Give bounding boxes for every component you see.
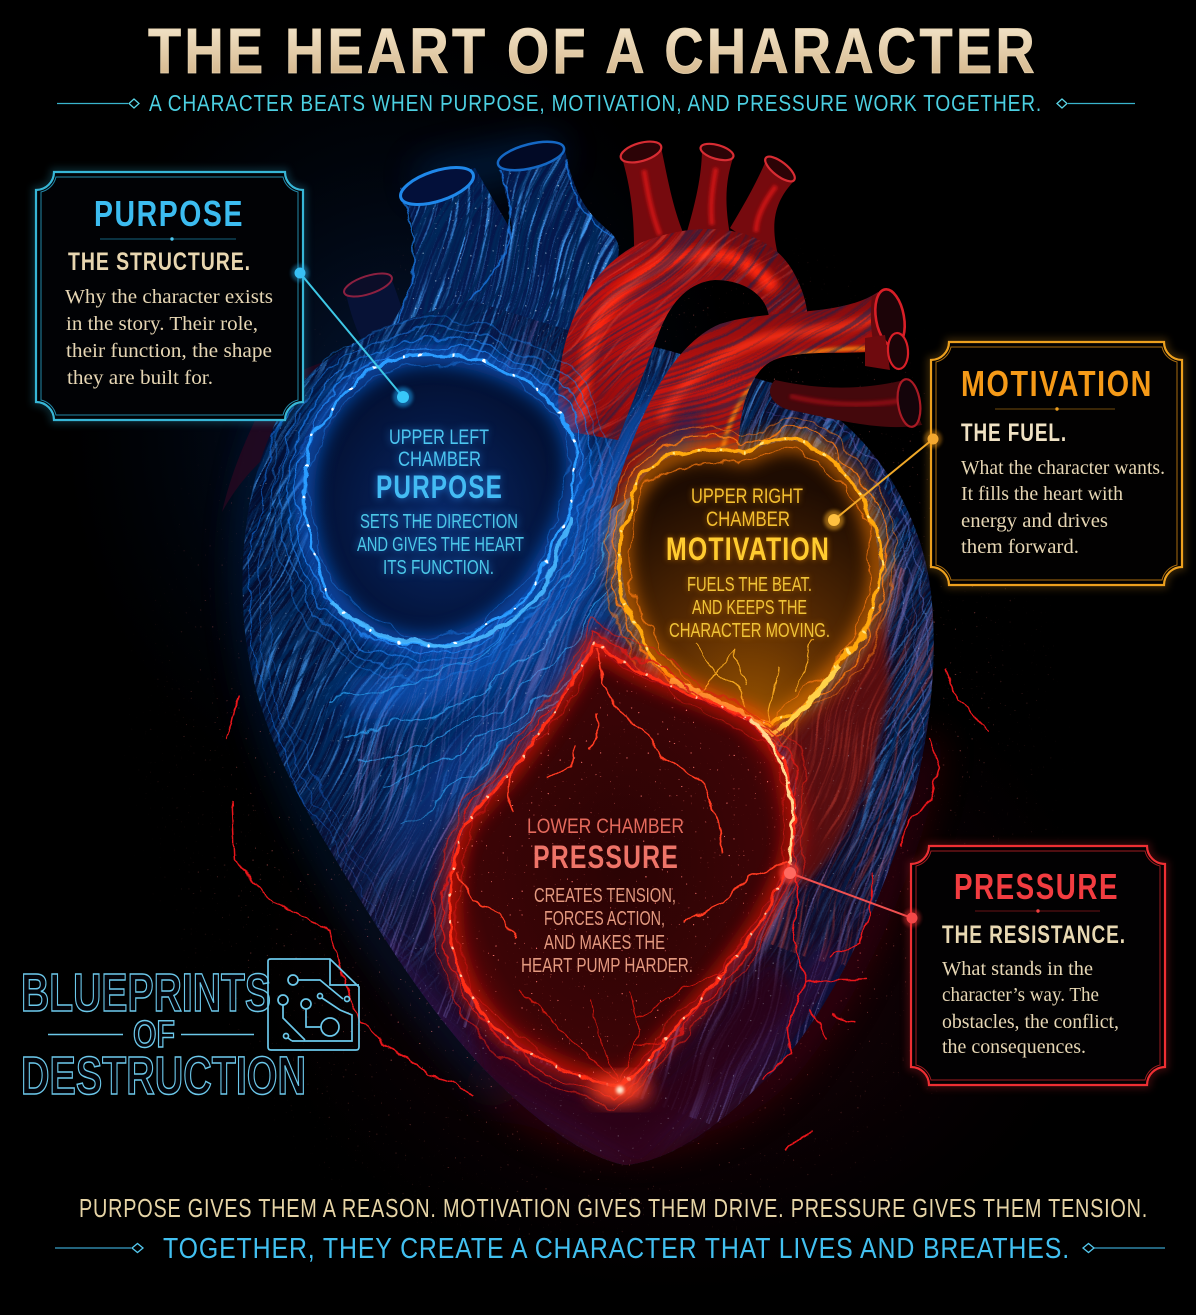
veins inside lower chamber [457,647,787,940]
dark red junction [590,640,770,740]
body text: obstacles, the conflict, [942,1011,1119,1033]
subtitle: A CHARACTER BEATS WHEN PURPOSE, MOTIVATION, AND PRESSURE WORK TOGETHER. [149,90,1042,116]
body text: What the character wants. [961,457,1165,479]
muscle fibres: left wall [242,300,934,1165]
apex flare [590,1076,650,1104]
maroon base below lower chamber [470,950,800,1170]
chamber text: upper right: MOTIVATION [666,531,830,567]
chamber text: upper left [357,426,524,579]
external lightning [226,668,990,1150]
body text: them forward. [961,536,1079,558]
chamber text: upper right: AND KEEPS THE [692,597,807,619]
connector: purpose [291,264,413,407]
interior sparks [440,640,800,1090]
heading: PURPOSE [94,193,244,234]
chamber text: upper right: UPPER RIGHT [691,485,803,508]
logo: blueprints of destruction [21,959,359,1106]
body text: Why the character exists [65,286,273,308]
junction lightning [750,720,792,865]
concentric red strands [435,621,805,1107]
illustration: anatomical heart [222,125,989,1165]
heart body silhouette [242,300,934,1165]
chamber text: lower: PRESSURE [533,839,679,875]
connector: pressure [779,862,921,927]
contour strands following the wall [247,402,932,999]
chamber text: upper left: CHAMBER [398,448,481,471]
panel: purpose [36,172,303,420]
panel: pressure [911,846,1165,1085]
body text: their function, the shape [66,340,272,362]
chamber text: upper left: PURPOSE [376,469,503,505]
lower wall tint [298,790,906,1165]
pulmonary branch [412,110,1108,690]
title: THE HEART OF A CHARACTER [148,15,1038,87]
body text: What stands in the [942,958,1093,980]
subheading: THE RESISTANCE. [942,921,1126,949]
body text: in the story. Their role, [66,313,258,335]
body text [961,457,1165,558]
chamber: upper left [272,320,609,681]
heading: PRESSURE [954,866,1119,907]
concentric muscle strands [272,320,609,681]
chamber text: upper right [666,485,830,642]
chamber text: lower: FORCES ACTION, [544,908,665,930]
chamber text: upper left: ITS FUNCTION. [383,557,494,579]
chamber text: lower: HEART PUMP HARDER. [521,955,693,977]
body text: It fills the heart with [961,483,1123,505]
subheading: THE FUEL. [961,419,1067,447]
heart aura glow [248,150,930,1139]
body text [65,286,273,389]
right wall fibres [332,314,934,1124]
blue band between chambers [350,392,690,700]
connector: motivation [824,430,942,530]
lower outer purple sheath [380,940,830,1150]
dark red muscle, right of lower chamber [775,610,890,890]
chamber text: lower: AND MAKES THE [544,932,665,954]
subheading: THE STRUCTURE. [68,248,251,276]
logo wordmark: DESTRUCTION [21,1046,306,1106]
chamber text: upper right: CHARACTER MOVING. [669,620,830,642]
chamber text: upper right: FUELS THE BEAT. [687,574,812,596]
heading: MOTIVATION [961,363,1153,404]
icon: circuit document [268,959,359,1050]
aortic arch [558,140,807,440]
logo wordmark: OF [133,1014,175,1056]
logo wordmark: BLUEPRINTS [21,963,271,1023]
chamber text: lower: CREATES TENSION, [534,885,676,907]
chamber text: upper left: UPPER LEFT [389,426,489,449]
body text: character’s way. The [942,984,1099,1006]
panel: motivation [931,342,1182,585]
body text: energy and drives [961,510,1108,532]
logo wordmark [21,963,306,1106]
concentric strands [606,423,895,745]
chamber text: lower [521,815,693,977]
footer line two: TOGETHER, THEY CREATE A CHARACTER THAT LIVES AND BREATHES. [163,1233,1070,1265]
chamber text: upper right: CHAMBER [706,508,790,531]
body text: they are built for. [67,367,213,389]
vessel: small dark left stub [341,269,410,360]
chamber: upper right [606,423,895,745]
vessel: dark lower right artery [770,378,923,428]
left dark red fringe [222,358,352,512]
chamber text: lower: LOWER CHAMBER [527,815,684,838]
vessels: blue arteries [389,140,619,330]
chamber: lower [435,621,805,1107]
body text: the consequences. [942,1036,1086,1058]
body text [942,958,1119,1058]
background [132,129,1058,1239]
chamber text: upper left: AND GIVES THE HEART [357,534,524,556]
chamber text: upper left: SETS THE DIRECTION [360,511,518,533]
